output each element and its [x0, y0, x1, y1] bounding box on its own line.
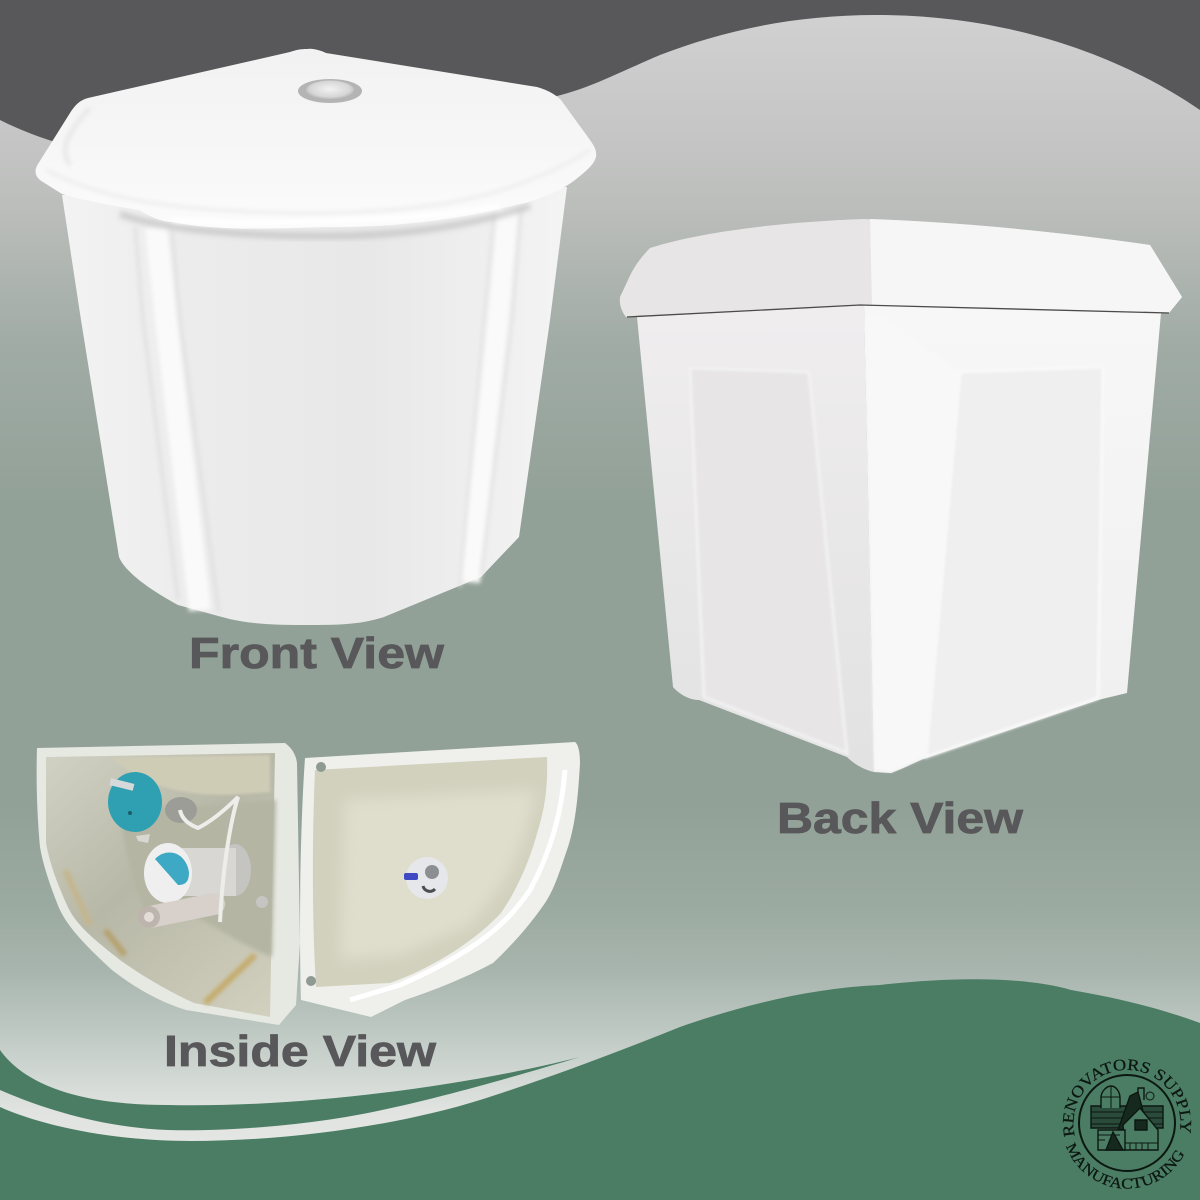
- shadow under lid: [120, 206, 530, 236]
- lid: [620, 219, 1182, 317]
- right recessed panel: [926, 367, 1103, 757]
- lid rim: [300, 742, 580, 1017]
- tank bolt: [256, 896, 268, 908]
- label: inside view: Inside View: [164, 1027, 437, 1076]
- flush button: [298, 79, 362, 103]
- screw holes: [306, 762, 326, 986]
- inside view: open tank: [37, 743, 300, 1025]
- logo: Renovators Supply Manufacturing: [1062, 1059, 1192, 1189]
- front view tank: [36, 49, 596, 625]
- drain fitting: [404, 857, 448, 899]
- corner edge: [866, 316, 960, 772]
- lid right highlight: [870, 219, 1182, 313]
- white fill hose: [180, 797, 238, 922]
- right face: [864, 305, 1161, 773]
- logo bottom text: MANUFACTURING: [1066, 1142, 1184, 1189]
- tank inner wall: [46, 753, 275, 1017]
- tank rim: [37, 743, 300, 1025]
- tank floor: [120, 800, 276, 957]
- blue float valve: [108, 772, 197, 843]
- lid rim highlight: [350, 770, 565, 1000]
- left face: [637, 305, 874, 772]
- overflow tube: [138, 904, 214, 928]
- tank body: [62, 187, 567, 625]
- lid gap line: [627, 305, 1169, 317]
- label: back view: Back View: [777, 794, 1024, 843]
- blue and white flush valve cap: [144, 843, 192, 903]
- back view tank: [620, 219, 1182, 773]
- inside view: open lid: [300, 742, 580, 1017]
- lid centre panel: [340, 790, 535, 960]
- lid shading bands: [46, 108, 590, 223]
- dark top wave band: [0, 0, 1200, 161]
- label: front view: Front View: [189, 629, 445, 678]
- logo ring: [1079, 1075, 1175, 1171]
- green crescent band: [0, 1050, 580, 1130]
- lid: [36, 49, 596, 229]
- logo top text: RENOVATORS SUPPLY: [1062, 1059, 1192, 1137]
- body fluting: [135, 210, 521, 613]
- top wall shelf: [110, 755, 270, 795]
- rust streaks: [65, 870, 255, 1003]
- green bottom wave: [0, 979, 1200, 1200]
- left recessed panel: [690, 368, 847, 753]
- logo house: [1091, 1086, 1163, 1150]
- flush valve cylinder: [219, 844, 251, 896]
- lid inner: [313, 757, 547, 987]
